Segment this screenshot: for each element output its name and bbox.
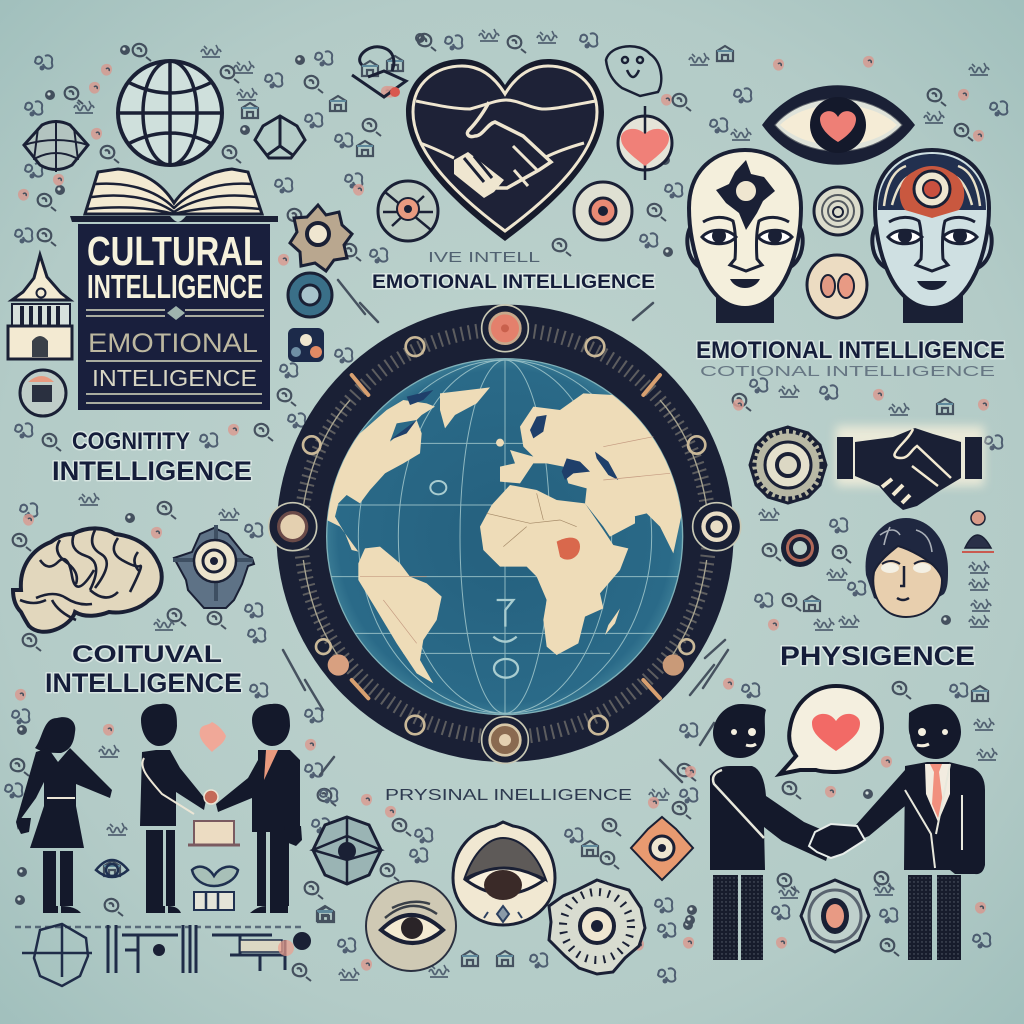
icon: small tile <box>188 821 240 845</box>
icon: target bottom right <box>801 880 869 952</box>
continents <box>327 387 683 683</box>
open book <box>70 169 278 222</box>
icon: small doodle gem <box>255 116 305 158</box>
book panel: cultural intelligence <box>70 169 278 410</box>
icon: portrait <box>866 518 948 617</box>
icon: star medallion <box>290 205 352 271</box>
dark cover <box>78 224 270 410</box>
icon: big eye medallion <box>453 822 555 925</box>
icon: eye with heart <box>762 85 915 165</box>
icon: small tile <box>288 328 324 362</box>
icon: small heart medallion <box>618 106 672 180</box>
icon: speech bubble with heart <box>780 686 882 774</box>
icon: wire globe <box>118 61 222 165</box>
icon: pink medallion <box>807 255 867 318</box>
heading: top emotional intelligence: EMOTIONAL INTELLIGENCE <box>372 272 655 293</box>
small heart <box>200 722 226 752</box>
icon: sun mandala <box>750 427 826 503</box>
icon: mandala medallion <box>378 181 438 241</box>
icon: swirl medallion <box>814 187 862 235</box>
heading: cognitive intelligence: COGNITITY <box>72 428 190 455</box>
heading: right emotional intelligence <box>696 337 1005 380</box>
icon: ring <box>781 529 819 567</box>
title: intelligence: INTELLIGENCE <box>87 268 263 305</box>
heading: right emotional intelligence: EMOTIONAL INTELLIGENCE <box>696 337 1005 364</box>
figure group: three people <box>16 704 302 913</box>
icon: heart with handshake <box>406 59 604 241</box>
heading: top emotional intelligence <box>372 249 655 293</box>
heading: physigence: PHYSIGENCE <box>780 641 975 671</box>
heading: contextual intelligence: INTELLIGENCE <box>45 668 242 698</box>
icon: diamond <box>631 817 693 880</box>
icon: cartoon face doodle <box>606 46 661 96</box>
icon: right face with mind pattern <box>872 150 992 323</box>
heading: cognitive intelligence <box>52 428 252 486</box>
icon: brain <box>13 528 162 632</box>
man left <box>140 704 206 913</box>
icon: polyhedral sphere <box>24 120 88 172</box>
icon: leaves and tile <box>192 867 238 910</box>
man right <box>216 704 302 913</box>
divider <box>86 310 264 403</box>
seas and marks <box>360 390 670 678</box>
heading: cognitive intelligence: INTELLIGENCE <box>52 456 252 486</box>
subtitle: emotional: EMOTIONAL <box>88 328 258 358</box>
graticule <box>327 360 683 713</box>
subtitle: inteligence: INTELIGENCE <box>92 365 257 391</box>
central globe <box>269 305 741 763</box>
handshake <box>809 824 865 858</box>
icon: eye medallion <box>366 881 456 971</box>
heading: top emotional intelligence: IVE INTELL <box>428 249 540 266</box>
figure group: two people shaking hands <box>710 704 985 960</box>
icon: target medallion <box>574 182 632 240</box>
icon: flower <box>549 880 645 974</box>
icon: blue medallion <box>288 273 332 317</box>
title: cultural: CULTURAL <box>87 228 263 274</box>
icon: round badge <box>20 370 66 416</box>
right person <box>823 704 985 960</box>
icon: bottom schematic strip <box>15 924 311 986</box>
icon: geometric eye <box>313 817 381 884</box>
woman <box>16 717 112 913</box>
icon: building <box>8 255 72 359</box>
heading: right emotional intelligence: COTIONAL INTELLIGENCE <box>700 363 995 380</box>
globe ring <box>276 305 734 762</box>
heading: physical intelligence: PRYSINAL INELLIGENCE <box>385 787 632 804</box>
icon: handshake <box>836 426 984 510</box>
icon: meditator <box>962 511 994 552</box>
ocean <box>327 359 683 715</box>
icon: pitcher doodle <box>352 47 406 97</box>
heading: contextual intelligence <box>45 641 242 698</box>
icon: eye doodle <box>96 860 128 877</box>
heading: contextual intelligence: COITUVAL <box>72 641 222 668</box>
icon: left face <box>687 150 803 323</box>
icon: gear <box>173 525 254 608</box>
ring medallions <box>269 305 741 763</box>
left person <box>710 704 834 960</box>
clasped hands <box>204 790 218 804</box>
